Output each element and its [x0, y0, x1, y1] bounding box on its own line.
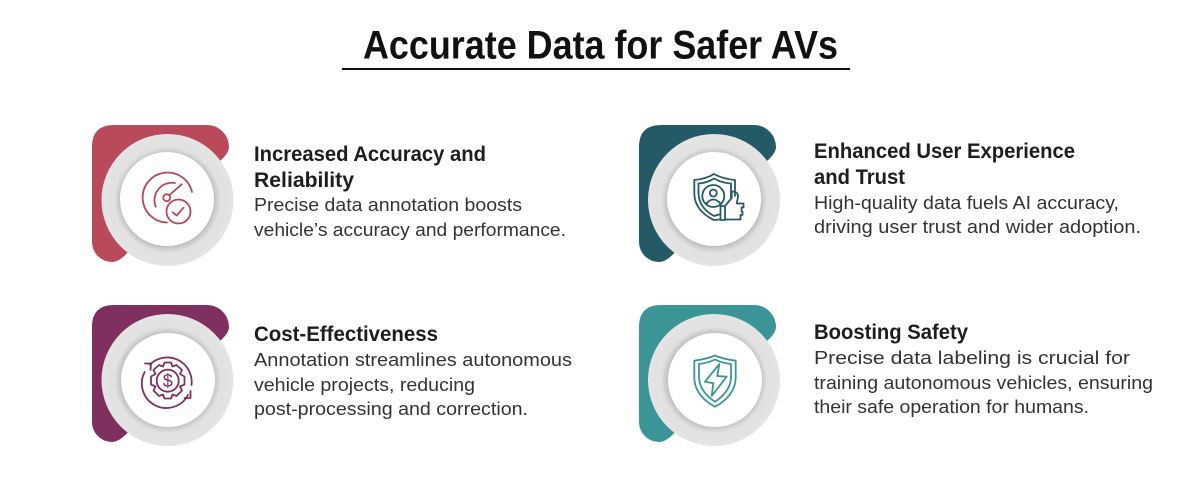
description: training autonomous vehicles, ensuring	[814, 373, 1153, 393]
description: their safe operation for humans.	[814, 397, 1089, 417]
description: High-quality data fuels AI accuracy,	[814, 193, 1119, 213]
description: Precise data labeling is crucial for	[814, 348, 1130, 368]
description: Annotation streamlines autonomous	[254, 350, 572, 370]
icon badge: shield with lightning bolt	[639, 305, 780, 446]
description: vehicle’s accuracy and performance.	[254, 220, 566, 240]
description: vehicle projects, reducing	[254, 375, 475, 395]
icon badge: gear with dollar: $	[163, 371, 173, 391]
heading: Boosting Safety	[814, 321, 968, 344]
heading: Cost-Effectiveness	[254, 323, 438, 346]
icon badge: gear with dollar	[92, 305, 234, 446]
panel: enhanced user experience and trust	[639, 125, 1141, 266]
description: post-processing and correction.	[254, 399, 528, 419]
panel: boosting safety	[639, 305, 1153, 446]
icon badge: shield with user and thumbs up	[639, 125, 780, 266]
panel: cost-effectiveness	[92, 305, 572, 446]
title: Accurate Data for Safer AVs	[363, 24, 838, 68]
icon badge: radar gauge with check	[92, 125, 234, 266]
heading: Increased Accuracy and	[254, 143, 486, 166]
heading: Enhanced User Experience	[814, 140, 1075, 163]
panel: increased accuracy and reliability	[92, 125, 566, 266]
heading: Reliability	[254, 169, 354, 192]
description: Precise data annotation boosts	[254, 195, 522, 215]
heading: and Trust	[814, 166, 905, 189]
description: driving user trust and wider adoption.	[814, 217, 1141, 237]
